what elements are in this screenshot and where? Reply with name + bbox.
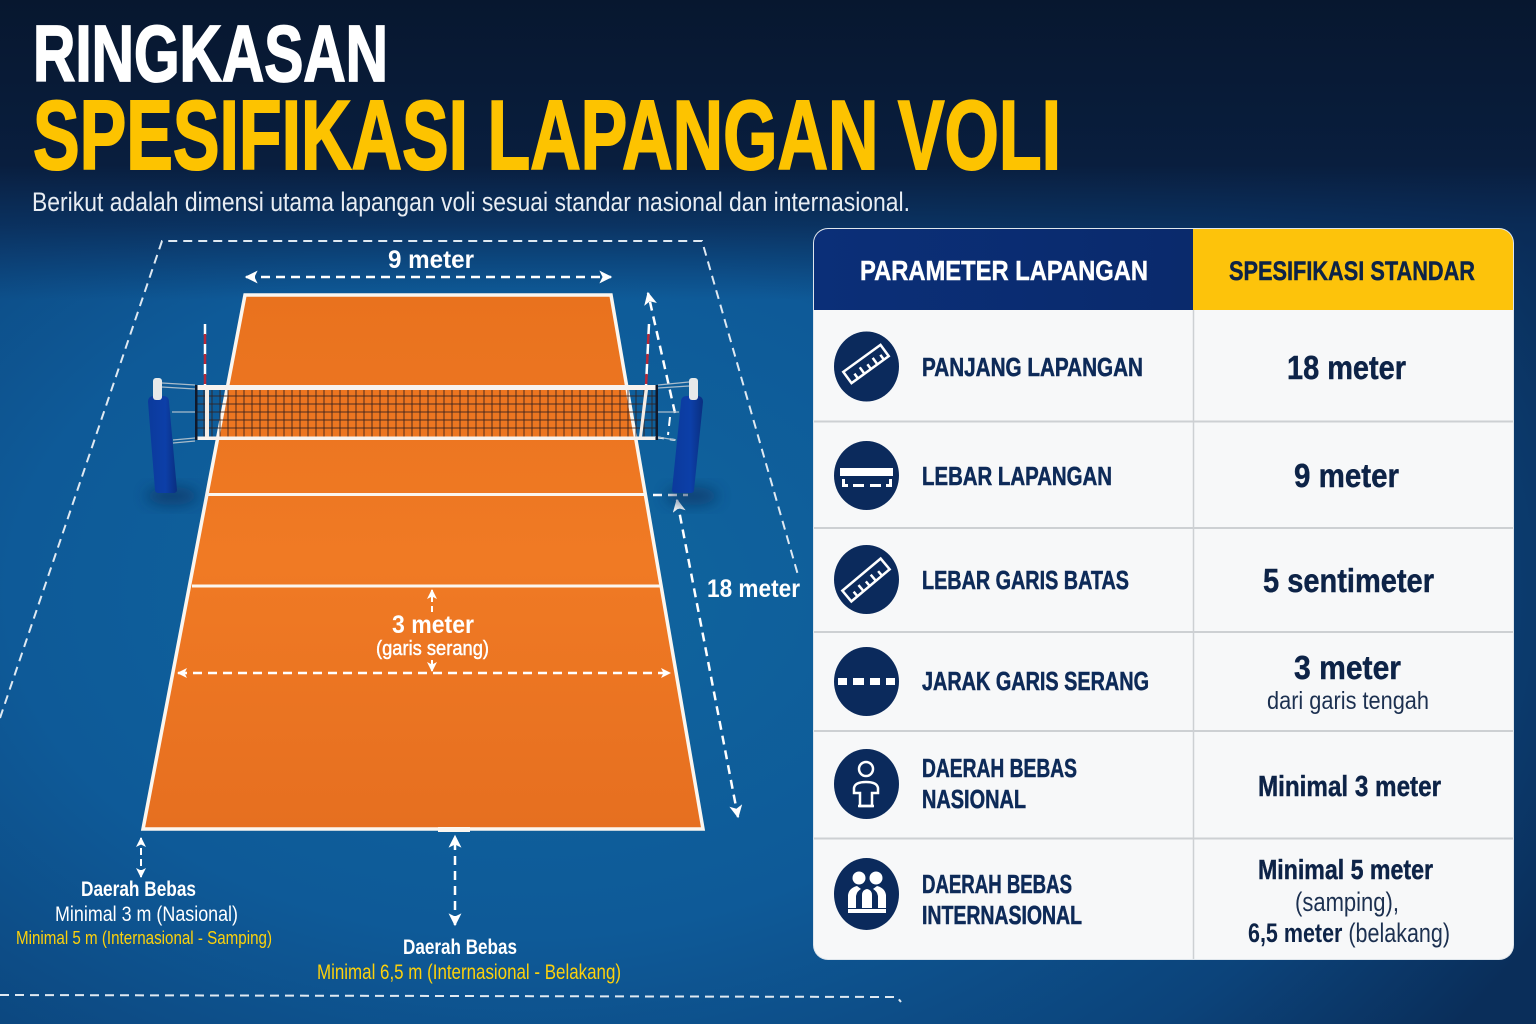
row: daerah bebas internasional [834, 854, 1450, 948]
label: 9 meter: 9 meter [388, 246, 474, 274]
header: parameter: PARAMETER LAPANGAN [860, 255, 1148, 286]
row: daerah bebas nasional: NASIONAL [922, 784, 1026, 814]
row: daerah bebas nasional [834, 749, 1441, 819]
icon: ruler [834, 545, 899, 614]
antenna right [646, 324, 649, 386]
center mark [438, 827, 470, 832]
right post [657, 378, 703, 493]
title [33, 9, 1061, 190]
post shadows [146, 487, 718, 505]
row: lebar lapangan: LEBAR LAPANGAN [922, 461, 1112, 491]
court surface [143, 295, 703, 829]
title: SPESIFIKASI LAPANGAN VOLI [33, 80, 1061, 190]
volleyball court [143, 295, 703, 832]
row: panjang lapangan: 18 meter [1287, 349, 1406, 386]
free zone dashed boundary [0, 241, 901, 1002]
callout: free zone back [317, 836, 621, 984]
row: lebar garis batas: 5 sentimeter [1263, 562, 1434, 599]
callout: free zone back: Daerah Bebas [403, 936, 517, 959]
antenna left [204, 324, 206, 386]
row: daerah bebas internasional: DAERAH BEBAS [922, 869, 1072, 899]
row: jarak garis serang: 3 meter [1294, 649, 1401, 686]
attack line near [192, 584, 661, 588]
label: 18 meter: 18 meter [707, 575, 800, 603]
row: jarak garis serang [834, 647, 1429, 716]
row: daerah bebas nasional: DAERAH BEBAS [922, 753, 1077, 783]
callout: free zone back: Minimal 6,5 m (Internasional - Belakang) [317, 961, 621, 984]
callout: free zone side [16, 838, 272, 948]
row: daerah bebas internasional: (samping), [1295, 887, 1399, 917]
header: specification: SPESIFIKASI STANDAR [1229, 256, 1475, 286]
icon: dashed line [834, 647, 899, 716]
row: daerah bebas nasional: Minimal 3 meter [1258, 771, 1441, 803]
row: lebar garis batas [834, 545, 1434, 614]
row: jarak garis serang: JARAK GARIS SERANG [922, 666, 1149, 696]
row: panjang lapangan [834, 332, 1406, 402]
title: RINGKASAN [33, 9, 388, 98]
icon: people [834, 858, 899, 930]
length arrow 18 meter [648, 293, 738, 817]
icon: ruler [834, 332, 899, 402]
label: 3 meter attack line: (garis serang) [376, 638, 489, 660]
row: daerah bebas internasional: INTERNASIONAL [922, 900, 1082, 930]
callout: free zone side: Minimal 3 m (Nasional) [55, 903, 238, 926]
attack line far [208, 493, 646, 496]
panel: specification table [813, 228, 1514, 960]
row: lebar garis batas: LEBAR GARIS BATAS [922, 565, 1129, 595]
callout: free zone side: Minimal 5 m (Internasional - Samping) [16, 928, 272, 948]
label: 3 meter attack line: 3 meter [392, 611, 474, 639]
callout: free zone side: Daerah Bebas [81, 878, 196, 901]
row: daerah bebas internasional: 6,5 meter (belakang) [1248, 918, 1450, 948]
row: lebar lapangan [834, 441, 1399, 510]
label: 3 meter attack line [178, 590, 670, 673]
row: daerah bebas internasional: Minimal 5 meter [1258, 854, 1433, 885]
net [195, 385, 658, 440]
left post [148, 378, 195, 493]
row: panjang lapangan: PANJANG LAPANGAN [922, 352, 1143, 382]
row: lebar lapangan: 9 meter [1294, 457, 1399, 494]
icon: width bar [834, 441, 899, 510]
row: jarak garis serang: dari garis tengah [1267, 687, 1429, 715]
icon: person [834, 749, 899, 819]
subtitle: Berikut adalah dimensi utama lapangan voli sesuai standar nasional dan internasional. [32, 187, 910, 217]
